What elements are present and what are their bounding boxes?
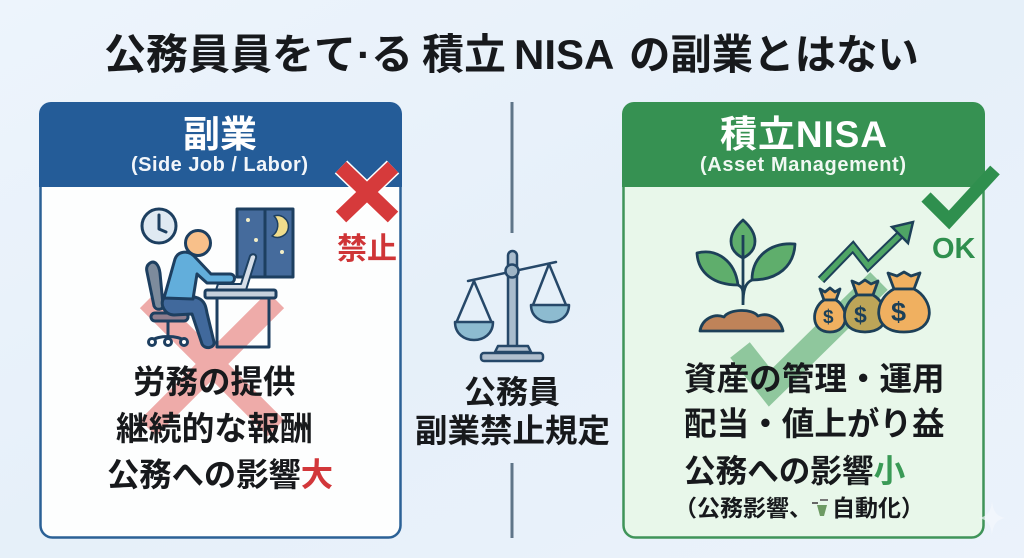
- desk: [205, 290, 276, 347]
- title: る: [371, 31, 413, 78]
- icon: money bags: [815, 272, 929, 332]
- sparkle mark: [979, 501, 1005, 535]
- side job text lines: 継続的な報酬: [116, 410, 313, 447]
- title: 積立: [422, 31, 506, 78]
- chair: [147, 262, 188, 346]
- icon: rising arrow: [821, 232, 903, 280]
- side job text lines: [107, 364, 333, 493]
- faded cross watermark: [148, 300, 276, 428]
- side job heading: 副業: [183, 114, 257, 155]
- center label: [415, 374, 610, 449]
- check OK icon: [926, 170, 995, 220]
- worker torso and arm: [164, 252, 234, 299]
- title: [104, 31, 919, 78]
- money bag medium: $: [854, 302, 867, 328]
- NISA text lines: 資産の管理・運用: [684, 360, 945, 397]
- money bag large: $: [891, 297, 906, 327]
- NISA text lines: 配当・値上がり益: [684, 405, 945, 442]
- icon: balance scale: [455, 251, 569, 361]
- side job subheading: (Side Job / Labor): [131, 154, 308, 176]
- center label: 公務員: [464, 374, 560, 410]
- OK label: OK: [932, 233, 976, 265]
- worker legs: [162, 295, 214, 348]
- icon: worker at desk at night: [142, 209, 293, 348]
- prohibited label: 禁止: [337, 233, 397, 266]
- side job text lines: 公務への影響大: [107, 457, 333, 493]
- NISA heading: 積立NISA: [720, 114, 887, 155]
- title: NISA: [514, 31, 614, 78]
- NISA text lines: （公務影響、: [674, 495, 812, 521]
- side job text lines: 労務の提供: [133, 364, 296, 400]
- NISA text lines: 自動化）: [832, 495, 924, 521]
- title: の副業とはない: [629, 32, 919, 78]
- title: 公務員員をて: [104, 31, 356, 78]
- panel: NISA: [622, 102, 995, 538]
- worker head: [186, 230, 210, 256]
- NISA header band: [622, 102, 985, 187]
- panel: side job: [39, 102, 402, 538]
- icon: night window: [237, 209, 293, 277]
- NISA text lines: 公務への影響小: [684, 453, 906, 489]
- smudged glyph: [812, 499, 828, 516]
- center label: 副業禁止規定: [415, 413, 610, 449]
- icon: clock: [142, 209, 176, 243]
- crossed prohibition icon: [341, 167, 393, 217]
- faded check watermark: [740, 281, 879, 388]
- icon: sprout: [697, 220, 795, 331]
- side job header band: [39, 102, 402, 187]
- center divider bottom: [510, 463, 514, 538]
- laptop: [216, 254, 256, 290]
- money bag small: $: [823, 307, 834, 328]
- NISA text lines: [674, 360, 945, 521]
- center divider top: [510, 102, 514, 233]
- title: ·: [357, 31, 371, 78]
- NISA subheading: (Asset Management): [700, 154, 906, 176]
